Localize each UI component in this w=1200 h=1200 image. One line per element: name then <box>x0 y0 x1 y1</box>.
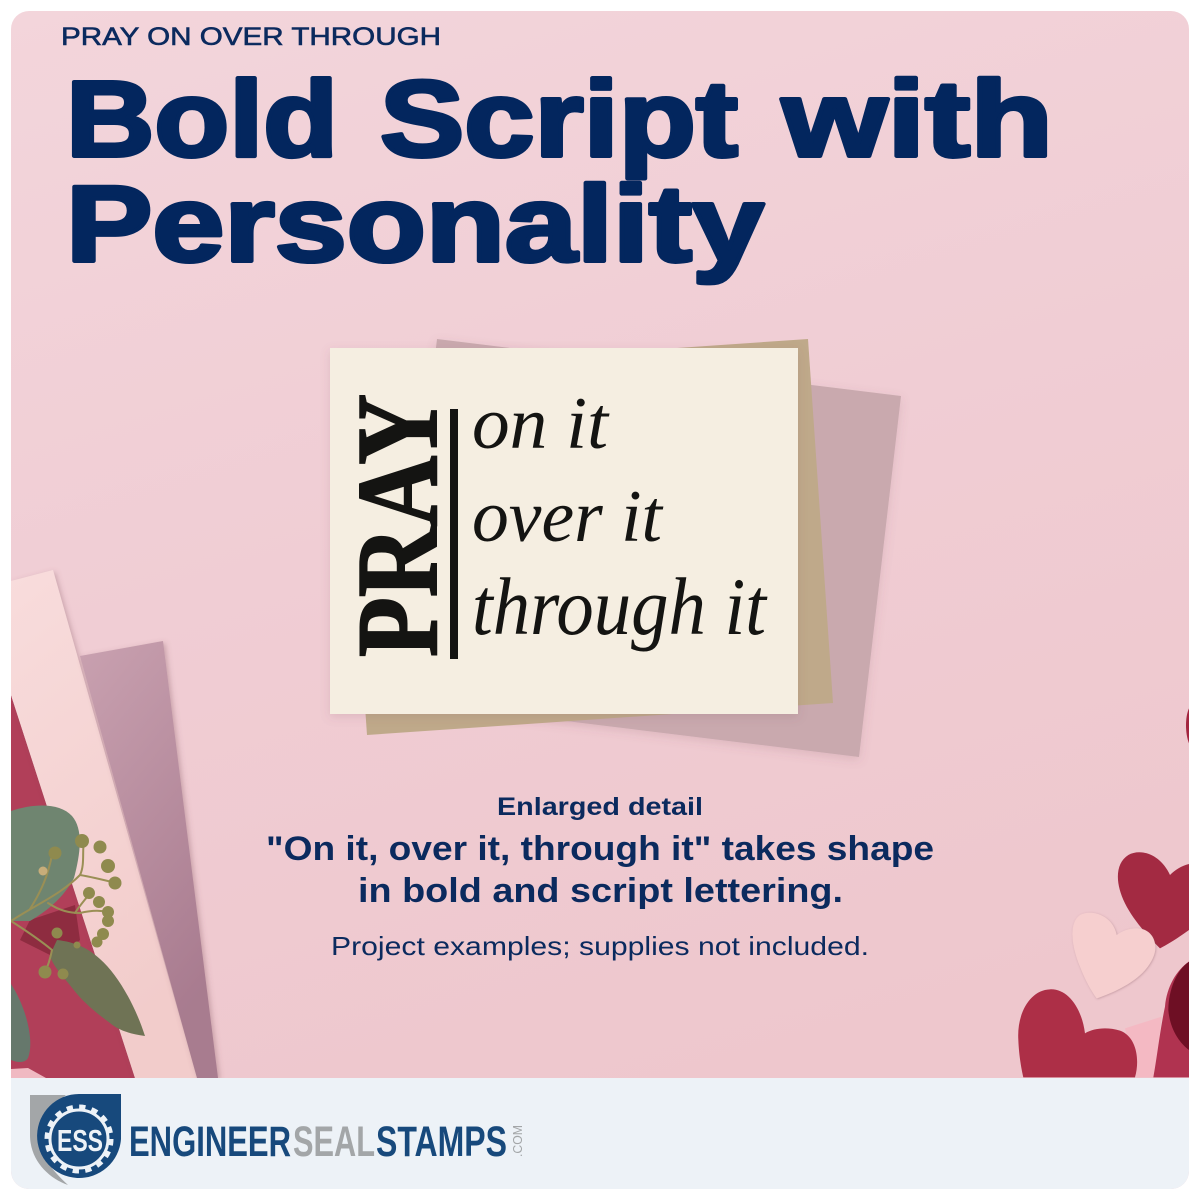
wordmark: STAMPS: STAMPS <box>376 1118 507 1166</box>
gray swoosh <box>30 1095 68 1185</box>
wordmark <box>129 1118 507 1166</box>
caption label: Enlarged detail <box>497 793 703 821</box>
mauve backing sheet <box>395 339 901 757</box>
caption headline line 2: in bold and script lettering. <box>358 872 843 910</box>
rotated word PRAY: PRAY <box>334 394 462 657</box>
crimson heart: lower <box>1018 989 1137 1077</box>
dark shadow behind sprig <box>20 905 80 960</box>
blue seal shield <box>37 1094 121 1178</box>
eucalyptus leaf: bottom edge <box>11 984 30 1062</box>
title word: Script: Script <box>380 58 738 179</box>
illustration: layered paper sheets and eucalyptus at lower left <box>11 570 218 1078</box>
stamp preview: layered cards with impression <box>330 339 901 757</box>
title word: Bold: Bold <box>66 58 338 179</box>
tan backing sheet <box>342 339 833 735</box>
logo: Engineer Seal Stamps <box>30 1094 525 1185</box>
crimson paper sheet <box>11 695 135 1078</box>
title <box>66 58 1053 284</box>
ribbon inner fold <box>1168 962 1189 1050</box>
ribbon <box>1153 962 1189 1077</box>
ESS initials: ESS <box>57 1123 103 1158</box>
illustration: paper hearts and ribbon at lower right <box>1018 708 1189 1077</box>
eucalyptus buds <box>38 834 122 980</box>
eucalyptus stems <box>11 848 110 966</box>
gear ring <box>50 1110 108 1168</box>
script line: on it: on it <box>472 383 610 465</box>
eucalyptus leaf: large <box>11 806 80 921</box>
wordmark: SEAL: SEAL <box>293 1118 375 1166</box>
caption headline line 1: "On it, over it, through it" takes shape <box>266 830 934 868</box>
vertical bar <box>450 409 458 659</box>
gear teeth <box>47 1107 111 1171</box>
crimson heart: upper <box>1118 852 1189 948</box>
panel: footer band <box>11 1078 1189 1189</box>
script line: through it: through it <box>472 561 768 652</box>
caption block <box>266 793 934 961</box>
eyebrow label: PRAY ON OVER THROUGH <box>61 23 441 51</box>
cream card <box>330 348 798 714</box>
title line 2: Personality <box>66 163 764 284</box>
wordmark: .COM: .COM <box>510 1125 525 1157</box>
pink tissue <box>1125 1017 1162 1077</box>
dark sliver at edge <box>1186 708 1189 743</box>
disclaimer: Project examples; supplies not included. <box>331 931 869 961</box>
eucalyptus leaf: long lower <box>50 940 145 1036</box>
pale pink paper sheet <box>11 570 197 1078</box>
light corner of paper <box>11 1068 46 1078</box>
logo emblem <box>30 1094 121 1185</box>
pale pink heart <box>1072 913 1155 998</box>
title word: with: with <box>781 58 1053 179</box>
mauve paper sheet <box>80 641 218 1078</box>
wordmark: ENGINEER: ENGINEER <box>129 1118 291 1166</box>
script line: over it: over it <box>472 476 664 558</box>
